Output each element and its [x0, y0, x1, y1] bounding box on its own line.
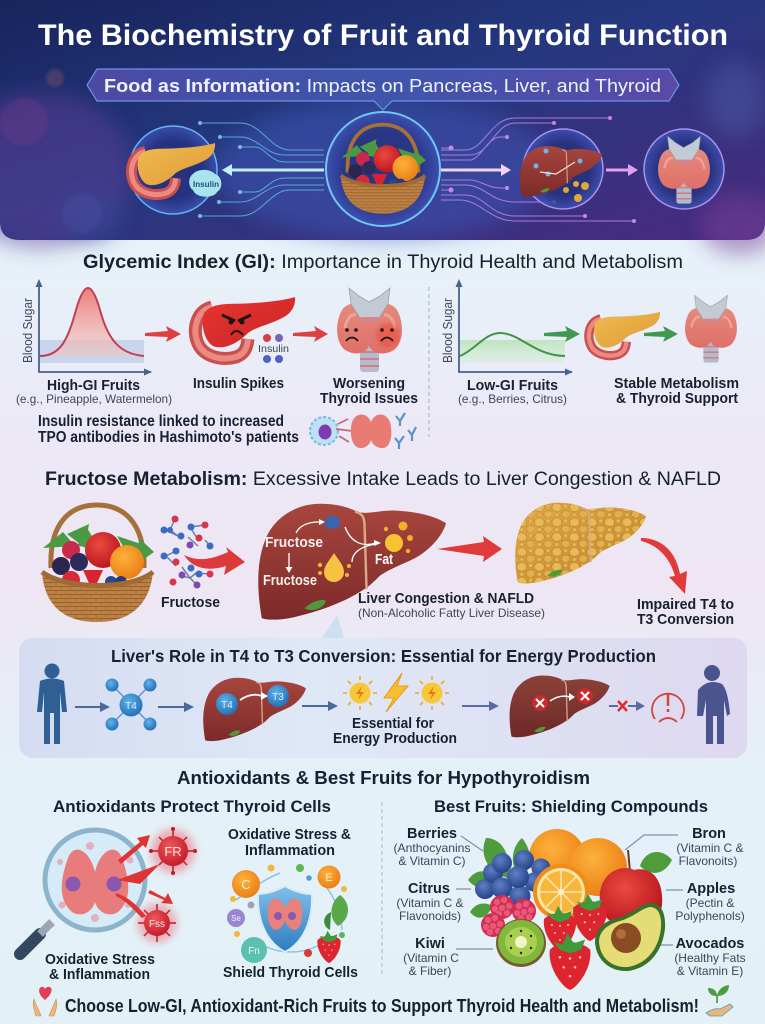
label: avocados: & Vitamin E) [677, 964, 743, 978]
label: bron [676, 826, 744, 868]
heading: antioxidants and best fruits: Antioxidants & Best Fruits for Hypothyroidism [177, 767, 590, 788]
subtitle banner [87, 69, 679, 110]
label: avocados [674, 936, 746, 978]
icon: magnifier with thyroid [20, 830, 145, 954]
label: essential for energy production: Energy Production [333, 730, 457, 747]
label: kiwi: (Vitamin C [403, 951, 459, 965]
chart: high-GI blood sugar curve: Blood Sugar [21, 298, 35, 363]
title: The Biochemistry of Fruit and Thyroid Function [38, 19, 728, 52]
label: high-GI fruits [16, 377, 172, 406]
label: oxidative stress and inflammation upper: Oxidative Stress & [228, 827, 351, 843]
icon: large fruit basket [42, 505, 154, 622]
label: apples: Apples [687, 881, 735, 897]
icon: free radical FR [149, 827, 197, 875]
icon: damaged liver [510, 676, 610, 737]
icon: pancreas circle [129, 126, 221, 214]
icon: liver with fructose pathway: Fructose [263, 572, 317, 589]
label: high-GI fruits: High-GI Fruits [47, 377, 140, 394]
label: oxidative stress and inflammation upper [228, 827, 351, 859]
arrows: radical damage [116, 835, 173, 918]
label: liver congestion and NAFLD [358, 590, 545, 620]
arrow liver to thyroid [606, 164, 638, 176]
circuit lines to liver and thyroid [441, 116, 636, 223]
icon: fructose molecules [160, 516, 214, 588]
label: impaired T4 to T3 conversion: Impaired T4 to [637, 596, 734, 613]
heading: fructose metabolism: Fructose Metabolism: Excessive Intake Leads to Liver Congestion & NAFLD [45, 469, 721, 490]
label: berries: (Anthocyanins [394, 841, 470, 855]
arrow [158, 702, 194, 712]
label: low-GI fruits: Low-GI Fruits [467, 377, 558, 394]
chart: high-GI blood sugar curve [21, 279, 152, 376]
chart: low-GI blood sugar curve [441, 279, 573, 376]
icon: heart in hands [33, 987, 57, 1016]
icon: free radical FR: FR [164, 844, 182, 859]
label: worsening thyroid issues: Worsening [333, 375, 405, 392]
label: apples: Polyphenols) [675, 909, 745, 923]
arrow [75, 702, 110, 712]
arrow: liver to fatty liver [437, 536, 502, 562]
label: essential for energy production [333, 715, 457, 747]
label: stable metabolism [614, 375, 739, 407]
label: worsening thyroid issues [320, 375, 418, 407]
icon: liver with fructose pathway [258, 504, 446, 620]
label: oxidative stress and inflammation: & Inflammation [49, 967, 150, 983]
arrow: fatty liver to impaired conversion [641, 538, 687, 594]
heading: liver's role: Liver's Role in T4 to T3 Conversion: Essential for Energy Production [111, 646, 656, 666]
icon: antioxidant shield [227, 864, 348, 963]
label: avocados: (Healthy Fats [674, 951, 746, 965]
label: high-GI fruits: (e.g., Pineapple, Watermelon) [16, 392, 172, 406]
arrow: low GI to pancreas [544, 326, 580, 342]
text: insulin resistance note: TPO antibodies in Hashimoto's patients [38, 429, 299, 446]
arrow: high GI to insulin spikes [145, 326, 181, 342]
label: impaired T4 to T3 conversion [637, 596, 734, 628]
icon: T4 molecule: T4 [125, 701, 137, 712]
label: apples: (Pectin & [686, 896, 734, 910]
icon: free radical Fss [137, 903, 177, 943]
glowing arrow to pancreas [222, 164, 324, 176]
heading: antioxidants protect thyroid cells: Antioxidants Protect Thyroid Cells [53, 797, 331, 816]
label: bron: Flavonoits) [679, 854, 737, 868]
label: impaired T4 to T3 conversion: T3 Conversion [637, 611, 734, 628]
chart: low-GI blood sugar curve: Blood Sugar [441, 298, 455, 363]
label: oxidative stress and inflammation: Oxidative Stress [45, 952, 155, 968]
header banner panel [0, 0, 765, 255]
icon: antioxidant shield: E [325, 872, 333, 884]
icon: healthy thyroid [685, 295, 737, 363]
label: apples [675, 881, 745, 923]
leader lines [456, 835, 683, 949]
icon: low energy gauge [652, 694, 684, 722]
icon: plant in hand [706, 985, 733, 1016]
callout: closing message: Choose Low-GI, Antioxidant-Rich Fruits to Support Thyroid Health and Metabolism! [65, 996, 699, 1016]
label: liver congestion and NAFLD: (Non-Alcoholic Fatty Liver Disease) [358, 606, 545, 620]
text: insulin resistance note [38, 413, 299, 446]
label: berries: Berries [407, 826, 457, 842]
text: insulin resistance note: Insulin resistance linked to increased [38, 413, 284, 430]
arrow: insulin to thyroid [293, 326, 328, 342]
label: citrus: Citrus [408, 881, 450, 897]
label: bron: (Vitamin C & [676, 841, 744, 855]
arrow: pancreas to thyroid [644, 326, 678, 342]
icon: thyroid circle [644, 129, 724, 209]
icon: free radical Fss: Fss [149, 919, 165, 930]
label: citrus [396, 881, 464, 923]
arrow: blocked conversion [609, 701, 645, 711]
icon: liver converting T4 to T3: T3 [272, 692, 284, 703]
icon: liver converting T4 to T3: T4 [221, 700, 233, 711]
label: avocados: Avocados [676, 936, 744, 952]
panel: liver's role [19, 615, 747, 758]
label: worsening thyroid issues: Thyroid Issues [320, 390, 418, 407]
label: citrus: (Vitamin C & [396, 896, 464, 910]
icon: fruit basket circle [326, 112, 440, 226]
label: kiwi: Kiwi [415, 936, 445, 952]
icon: angry pancreas: Insulin [258, 344, 289, 355]
icon: fatigued person [697, 665, 730, 744]
icon: antioxidant shield: Fn [248, 946, 260, 957]
divider [381, 802, 383, 977]
label: oxidative stress and inflammation [45, 952, 155, 983]
label: fructose: Fructose [161, 594, 220, 611]
label: berries [394, 826, 470, 868]
subtitle banner: Food as Information: Impacts on Pancreas, Liver, and Thyroid [104, 76, 661, 96]
label: oxidative stress and inflammation upper: Inflammation [245, 843, 335, 859]
icon: antioxidant shield: C [241, 877, 251, 892]
icon: liver with fructose pathway: Fructose [265, 534, 323, 551]
heading: best fruits: Best Fruits: Shielding Compounds [434, 797, 708, 816]
icon: immune cell attacking thyroid [310, 413, 416, 449]
label: stable metabolism: Stable Metabolism [614, 375, 739, 392]
label: essential for energy production: Essential for [352, 715, 434, 732]
label: kiwi [403, 936, 459, 978]
icon: sad thyroid [337, 288, 402, 372]
divider [428, 287, 430, 437]
icon: pancreas circle: Insulin [193, 180, 219, 189]
icon: liver converting T4 to T3 [203, 678, 306, 741]
icon: fatty liver [515, 503, 646, 583]
label: stable metabolism: & Thyroid Support [616, 390, 738, 407]
label: kiwi: & Fiber) [409, 964, 451, 978]
heading: glycemic index: Glycemic Index (GI): Importance in Thyroid Health and Metabolism [83, 251, 683, 273]
icon: angry pancreas [195, 297, 295, 363]
label: low-GI fruits [458, 377, 567, 406]
label: shield thyroid cells: Shield Thyroid Cells [223, 964, 358, 981]
label: berries: & Vitamin C) [398, 854, 466, 868]
label: liver congestion and NAFLD: Liver Congestion & NAFLD [358, 590, 534, 607]
label: insulin spikes: Insulin Spikes [193, 375, 284, 392]
label: citrus: Flavonoids) [399, 909, 461, 923]
icon: liver circle [520, 129, 603, 209]
icon: liver with fructose pathway: Fat [375, 551, 393, 568]
label: bron: Bron [692, 826, 726, 842]
arrow [462, 701, 499, 711]
arrow: fructose to liver [184, 547, 245, 575]
glowing arrow to liver [441, 164, 511, 176]
icon: energy suns and bolt [343, 673, 449, 712]
circuit lines to pancreas [198, 121, 324, 218]
icon: T4 molecule [106, 678, 156, 730]
icon: fruit pile [468, 829, 672, 990]
icon: healthy pancreas [589, 312, 660, 356]
label: low-GI fruits: (e.g., Berries, Citrus) [458, 392, 567, 406]
arrow [302, 701, 338, 711]
icon: antioxidant shield: Se [231, 914, 241, 923]
icon: person [37, 664, 67, 744]
